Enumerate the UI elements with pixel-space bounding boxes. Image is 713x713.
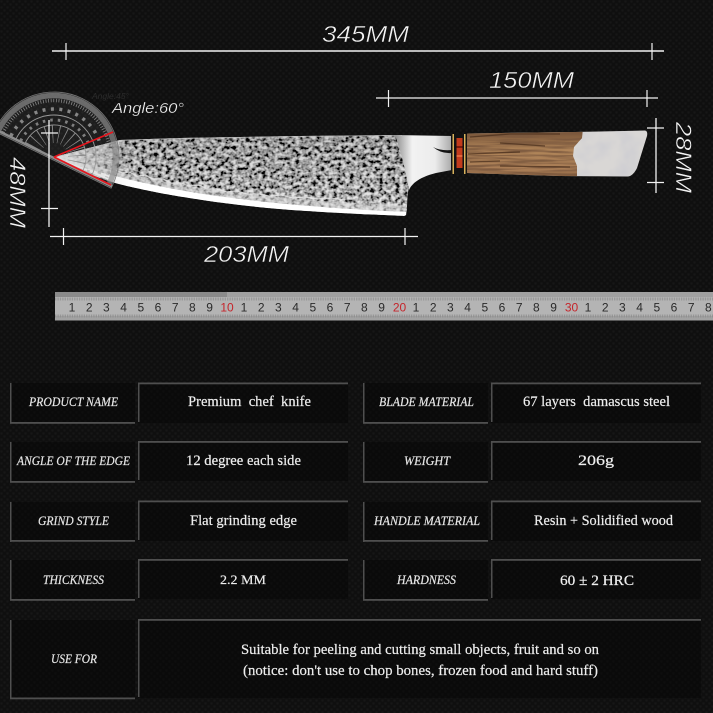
ruler: 30	[565, 300, 578, 314]
spec: angle of the edge label: ANGLE OF THE EDGE	[16, 454, 130, 468]
spec: hardness value: 60 ± 2 HRC	[560, 573, 634, 589]
spec: angle of the edge value: 12 degree each side	[186, 453, 301, 469]
collar	[451, 134, 468, 174]
spec: use for value	[138, 619, 701, 698]
handle	[467, 130, 648, 176]
spec: product name label	[10, 383, 135, 424]
ruler: 2	[258, 300, 265, 314]
spec: handle material label: HANDLE MATERIAL	[373, 514, 480, 528]
spec: use for value: Suitable for peeling and cutting small objects, fruit and so on	[241, 642, 599, 658]
ruler: 6	[155, 300, 162, 314]
knife	[50, 128, 652, 220]
ruler: 7	[172, 300, 179, 314]
dimension: 150MM: 150MM	[489, 67, 575, 93]
spec: grind style value: Flat grinding edge	[190, 513, 297, 529]
ruler: 6	[327, 300, 334, 314]
spec: use for label	[10, 620, 135, 699]
ruler: 7	[688, 300, 695, 314]
dimension: 28MM: 28MM	[671, 121, 696, 194]
spec: grind style label	[10, 502, 135, 542]
bolster	[395, 135, 452, 190]
spec: handle material value	[491, 500, 701, 541]
blade	[56, 135, 409, 216]
dimension: 48MM	[5, 120, 58, 229]
ruler: 8	[705, 300, 712, 314]
dimension: 48MM: 48MM	[5, 157, 30, 229]
angle label: Angle:60°	[111, 100, 184, 117]
ruler: 20	[393, 300, 406, 314]
spec: use for value: (notice: don't use to chop bones, frozen food and hard stuff)	[243, 663, 598, 679]
spec: thickness value	[138, 559, 348, 599]
ruler: 9	[550, 300, 557, 314]
ruler: 3	[275, 300, 282, 314]
ruler: 10	[220, 300, 234, 314]
spec: thickness value: 2.2 MM	[220, 572, 266, 587]
protractor	[0, 70, 141, 188]
ruler: 4	[636, 300, 643, 314]
ruler: 5	[309, 300, 316, 314]
ruler	[55, 292, 713, 320]
spec: use for label: USE FOR	[51, 652, 97, 666]
ruler: 3	[447, 300, 454, 314]
ruler: 9	[206, 300, 213, 314]
ruler: 5	[653, 300, 660, 314]
ruler: 7	[516, 300, 523, 314]
ruler: 5	[137, 300, 144, 314]
ruler: 3	[103, 300, 110, 314]
faint angle label: Angle:45°	[91, 91, 130, 101]
spec: hardness value	[491, 559, 701, 599]
ruler: 2	[86, 300, 93, 314]
ruler: 4	[292, 300, 299, 314]
ruler: 1	[413, 300, 420, 314]
ruler: 3	[619, 300, 626, 314]
ruler: 8	[361, 300, 368, 314]
ruler: 8	[189, 300, 196, 314]
spec: grind style label: GRIND STYLE	[38, 514, 109, 528]
dimension: 28MM	[647, 118, 696, 194]
spec: product name value	[138, 382, 348, 423]
spec: weight value: 206g	[578, 453, 615, 469]
ruler: 1	[69, 300, 76, 314]
spec: hardness label	[363, 560, 488, 601]
ruler: 4	[464, 300, 471, 314]
spec: hardness label: HARDNESS	[396, 573, 457, 587]
ruler: 1	[241, 300, 248, 314]
ruler: 1	[585, 300, 592, 314]
spec: product name label: PRODUCT NAME	[28, 395, 118, 409]
ruler: 7	[344, 300, 351, 314]
spec: thickness label	[10, 560, 135, 601]
ruler: 2	[430, 300, 437, 314]
spec: angle of the edge value	[138, 441, 348, 481]
ruler: 4	[120, 300, 127, 314]
spec: handle material label	[363, 502, 488, 542]
spec: blade material label	[363, 383, 488, 424]
spec: product name value: Premium chef knife	[188, 394, 311, 410]
spec: blade material label: BLADE MATERIAL	[379, 395, 474, 409]
dimension: 345MM: 345MM	[322, 21, 410, 47]
ruler: 6	[671, 300, 678, 314]
spec: grind style value	[138, 500, 348, 541]
red angle lines	[54, 132, 113, 185]
ruler: 5	[481, 300, 488, 314]
ruler: 8	[533, 300, 540, 314]
spec: blade material value: 67 layers damascus steel	[523, 394, 670, 410]
ruler: 9	[378, 300, 385, 314]
spec: thickness label: THICKNESS	[43, 573, 105, 587]
ruler: 2	[602, 300, 609, 314]
spec: handle material value: Resin + Solidified wood	[534, 513, 673, 529]
spec: weight label: WEIGHT	[404, 454, 451, 468]
spec: weight label	[363, 442, 488, 483]
spec: weight value	[491, 441, 701, 481]
spec: angle of the edge label	[10, 442, 135, 483]
ruler: 6	[499, 300, 506, 314]
spec: blade material value	[491, 382, 701, 423]
dimension: 203MM: 203MM	[203, 241, 290, 267]
